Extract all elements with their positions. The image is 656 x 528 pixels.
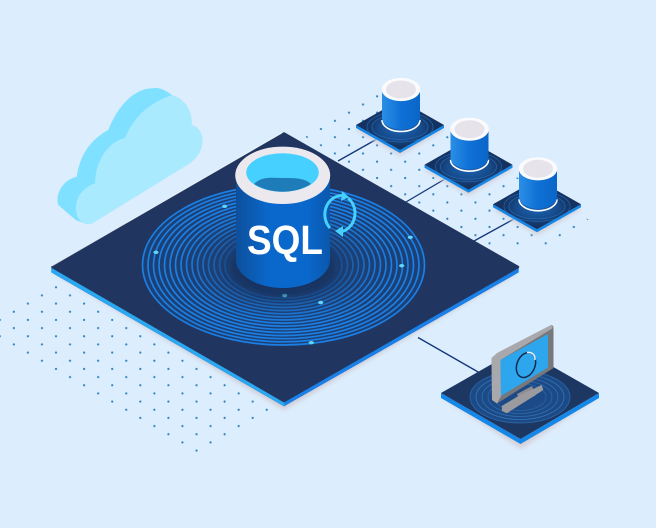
main board [52,133,518,410]
board edge [52,268,518,406]
cylinder body [236,176,330,288]
icon: sync arrows [325,191,355,237]
ring node dots [153,205,413,344]
dot grid: lower left [0,284,271,455]
board top [52,134,518,401]
connector: main board to database 1 [338,139,377,161]
database node 1 [356,78,444,156]
database node 3 [493,157,581,235]
cylinder shadow [231,241,335,295]
concentric rings [142,185,424,345]
board shadow [54,140,516,410]
monitor node [441,325,599,449]
monitor board top [441,348,599,439]
connector: main board to database 3 [474,219,514,241]
monitor stand [517,386,536,404]
connector: main board to monitor [418,338,479,372]
dot grid: upper right [304,94,591,250]
monitor board rings [470,371,570,423]
cylinder opening [246,153,319,192]
icon: cloud [57,88,203,224]
monitor frame [492,325,554,404]
connector: main board to database 2 [406,179,445,202]
label: SQL: SQL [247,217,323,263]
monitor progress ring [513,350,539,380]
cylinder rim [235,147,330,204]
database node 2 [424,118,512,196]
monitor board edge [441,393,599,444]
monitor board shadow [443,352,597,449]
SQL database cylinder [231,147,355,295]
monitor screen [500,334,548,396]
